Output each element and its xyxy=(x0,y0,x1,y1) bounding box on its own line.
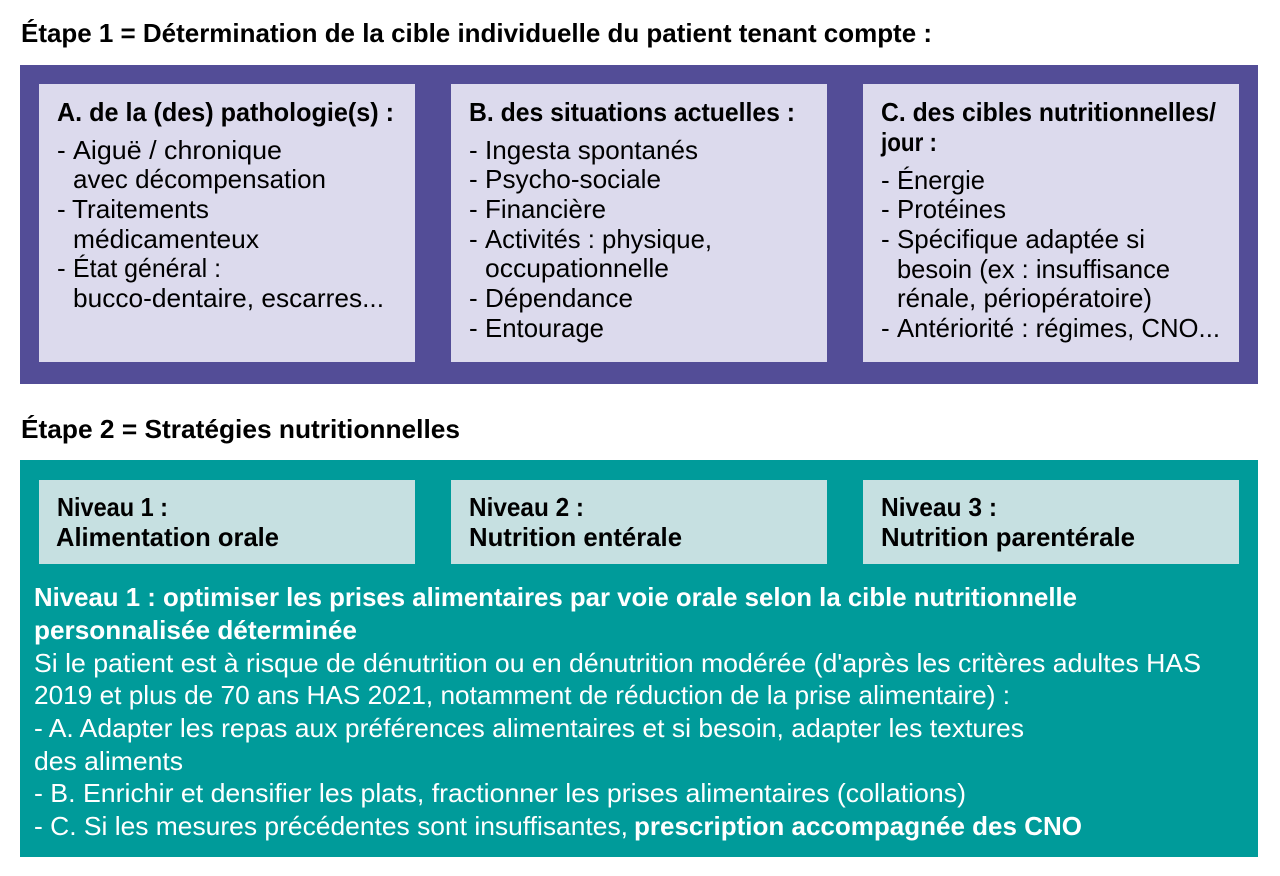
text block: niveau 1 détail: des aliments xyxy=(34,746,183,776)
panel A: pathologies: bucco-dentaire, escarres... xyxy=(73,283,384,313)
heading: étape 2: Étape 2 = Stratégies nutritionnelles xyxy=(21,414,460,444)
text block: niveau 1 détail: Niveau 1 : optimiser les prises alimentaires par voie orale selon la cible nutritionnelle xyxy=(34,582,1077,612)
panel A: pathologies xyxy=(39,84,415,362)
panel B: situations actuelles: Ingesta spontanés xyxy=(485,135,698,165)
panel A: pathologies: médicamenteux xyxy=(73,224,259,254)
text block: niveau 1 détail xyxy=(34,582,1201,841)
text block: niveau 1 détail: prescription accompagnée des CNO xyxy=(634,811,1082,841)
panel C: cibles nutritionnelles: Antériorité : régimes, CNO... xyxy=(897,313,1220,343)
box: niveau 1 xyxy=(39,480,415,564)
panel: étape 2 xyxy=(20,460,1258,857)
box: niveau 1: Alimentation orale xyxy=(56,522,279,552)
panel B: situations actuelles xyxy=(451,84,827,362)
panel A: pathologies: - xyxy=(57,253,66,283)
panel B: situations actuelles: - xyxy=(469,313,478,343)
panel B: situations actuelles: - xyxy=(469,135,478,165)
text block: niveau 1 détail: - A. Adapter les repas aux préférences alimentaires et si besoin, adapter les textures xyxy=(34,713,1024,743)
panel A: pathologies: Aiguë / chronique xyxy=(73,135,282,165)
panel B: situations actuelles: - xyxy=(469,194,478,224)
text block: niveau 1 détail: personnalisée déterminée xyxy=(34,615,357,645)
panel B: situations actuelles: B. des situations actuelles : xyxy=(469,97,795,127)
heading: étape 1: Étape 1 = Détermination de la cible individuelle du patient tenant compte : xyxy=(21,18,932,48)
panel C: cibles nutritionnelles: Spécifique adaptée si xyxy=(897,224,1145,254)
panel A: pathologies: Traitements xyxy=(72,194,209,224)
box: niveau 1: Niveau 1 : xyxy=(57,492,168,522)
panel A: pathologies: avec décompensation xyxy=(73,164,326,194)
panel C: cibles nutritionnelles: Protéines xyxy=(897,194,1006,224)
text block: niveau 1 détail: 2019 et plus de 70 ans HAS 2021, notamment de réduction de la prise alimentaire) : xyxy=(34,680,1010,710)
panel A: pathologies: - xyxy=(57,194,66,224)
panel B: situations actuelles: - xyxy=(469,224,478,254)
panel C: cibles nutritionnelles xyxy=(863,84,1239,362)
panel B: situations actuelles: occupationnelle xyxy=(485,253,669,283)
panel C: cibles nutritionnelles: - xyxy=(881,313,890,343)
box: niveau 2 xyxy=(451,480,827,564)
panel C: cibles nutritionnelles: Énergie xyxy=(897,165,985,195)
panel B: situations actuelles: Dépendance xyxy=(485,283,633,313)
text block: niveau 1 détail: - C. Si les mesures précédentes sont insuffisantes, xyxy=(34,811,628,841)
panel B: situations actuelles: Activités : physique, xyxy=(485,224,712,254)
panel: étape 1 xyxy=(20,65,1258,384)
panel C: cibles nutritionnelles: C. des cibles nutritionnelles/ xyxy=(881,97,1216,127)
panel C: cibles nutritionnelles: rénale, périopératoire) xyxy=(897,283,1152,313)
text block: niveau 1 détail: - B. Enrichir et densifier les plats, fractionner les prises alimentaires (collations) xyxy=(34,778,966,808)
panel C: cibles nutritionnelles: - xyxy=(881,165,890,195)
panel A: pathologies: A. de la (des) pathologie(s) : xyxy=(57,97,394,127)
panel B: situations actuelles: Entourage xyxy=(485,313,604,343)
box: niveau 3: Niveau 3 : xyxy=(881,492,997,522)
text block: niveau 1 détail: Si le patient est à risque de dénutrition ou en dénutrition modérée (d'après les critères adultes HAS xyxy=(34,648,1201,678)
panel A: pathologies: - xyxy=(57,135,66,165)
box: niveau 2: Nutrition entérale xyxy=(469,522,682,552)
box: niveau 3 xyxy=(863,480,1239,564)
panel B: situations actuelles: Psycho-sociale xyxy=(485,164,661,194)
panel C: cibles nutritionnelles: - xyxy=(881,194,890,224)
box: niveau 3: Nutrition parentérale xyxy=(881,522,1135,552)
panel A: pathologies: État général : xyxy=(73,253,221,283)
panel C: cibles nutritionnelles: jour : xyxy=(880,127,937,157)
panel B: situations actuelles: - xyxy=(469,283,478,313)
panel B: situations actuelles: - xyxy=(469,164,478,194)
panel C: cibles nutritionnelles: - xyxy=(881,224,890,254)
box: niveau 2: Niveau 2 : xyxy=(469,492,584,522)
panel C: cibles nutritionnelles: besoin (ex : insuffisance xyxy=(897,254,1170,284)
panel B: situations actuelles: Financière xyxy=(485,194,606,224)
